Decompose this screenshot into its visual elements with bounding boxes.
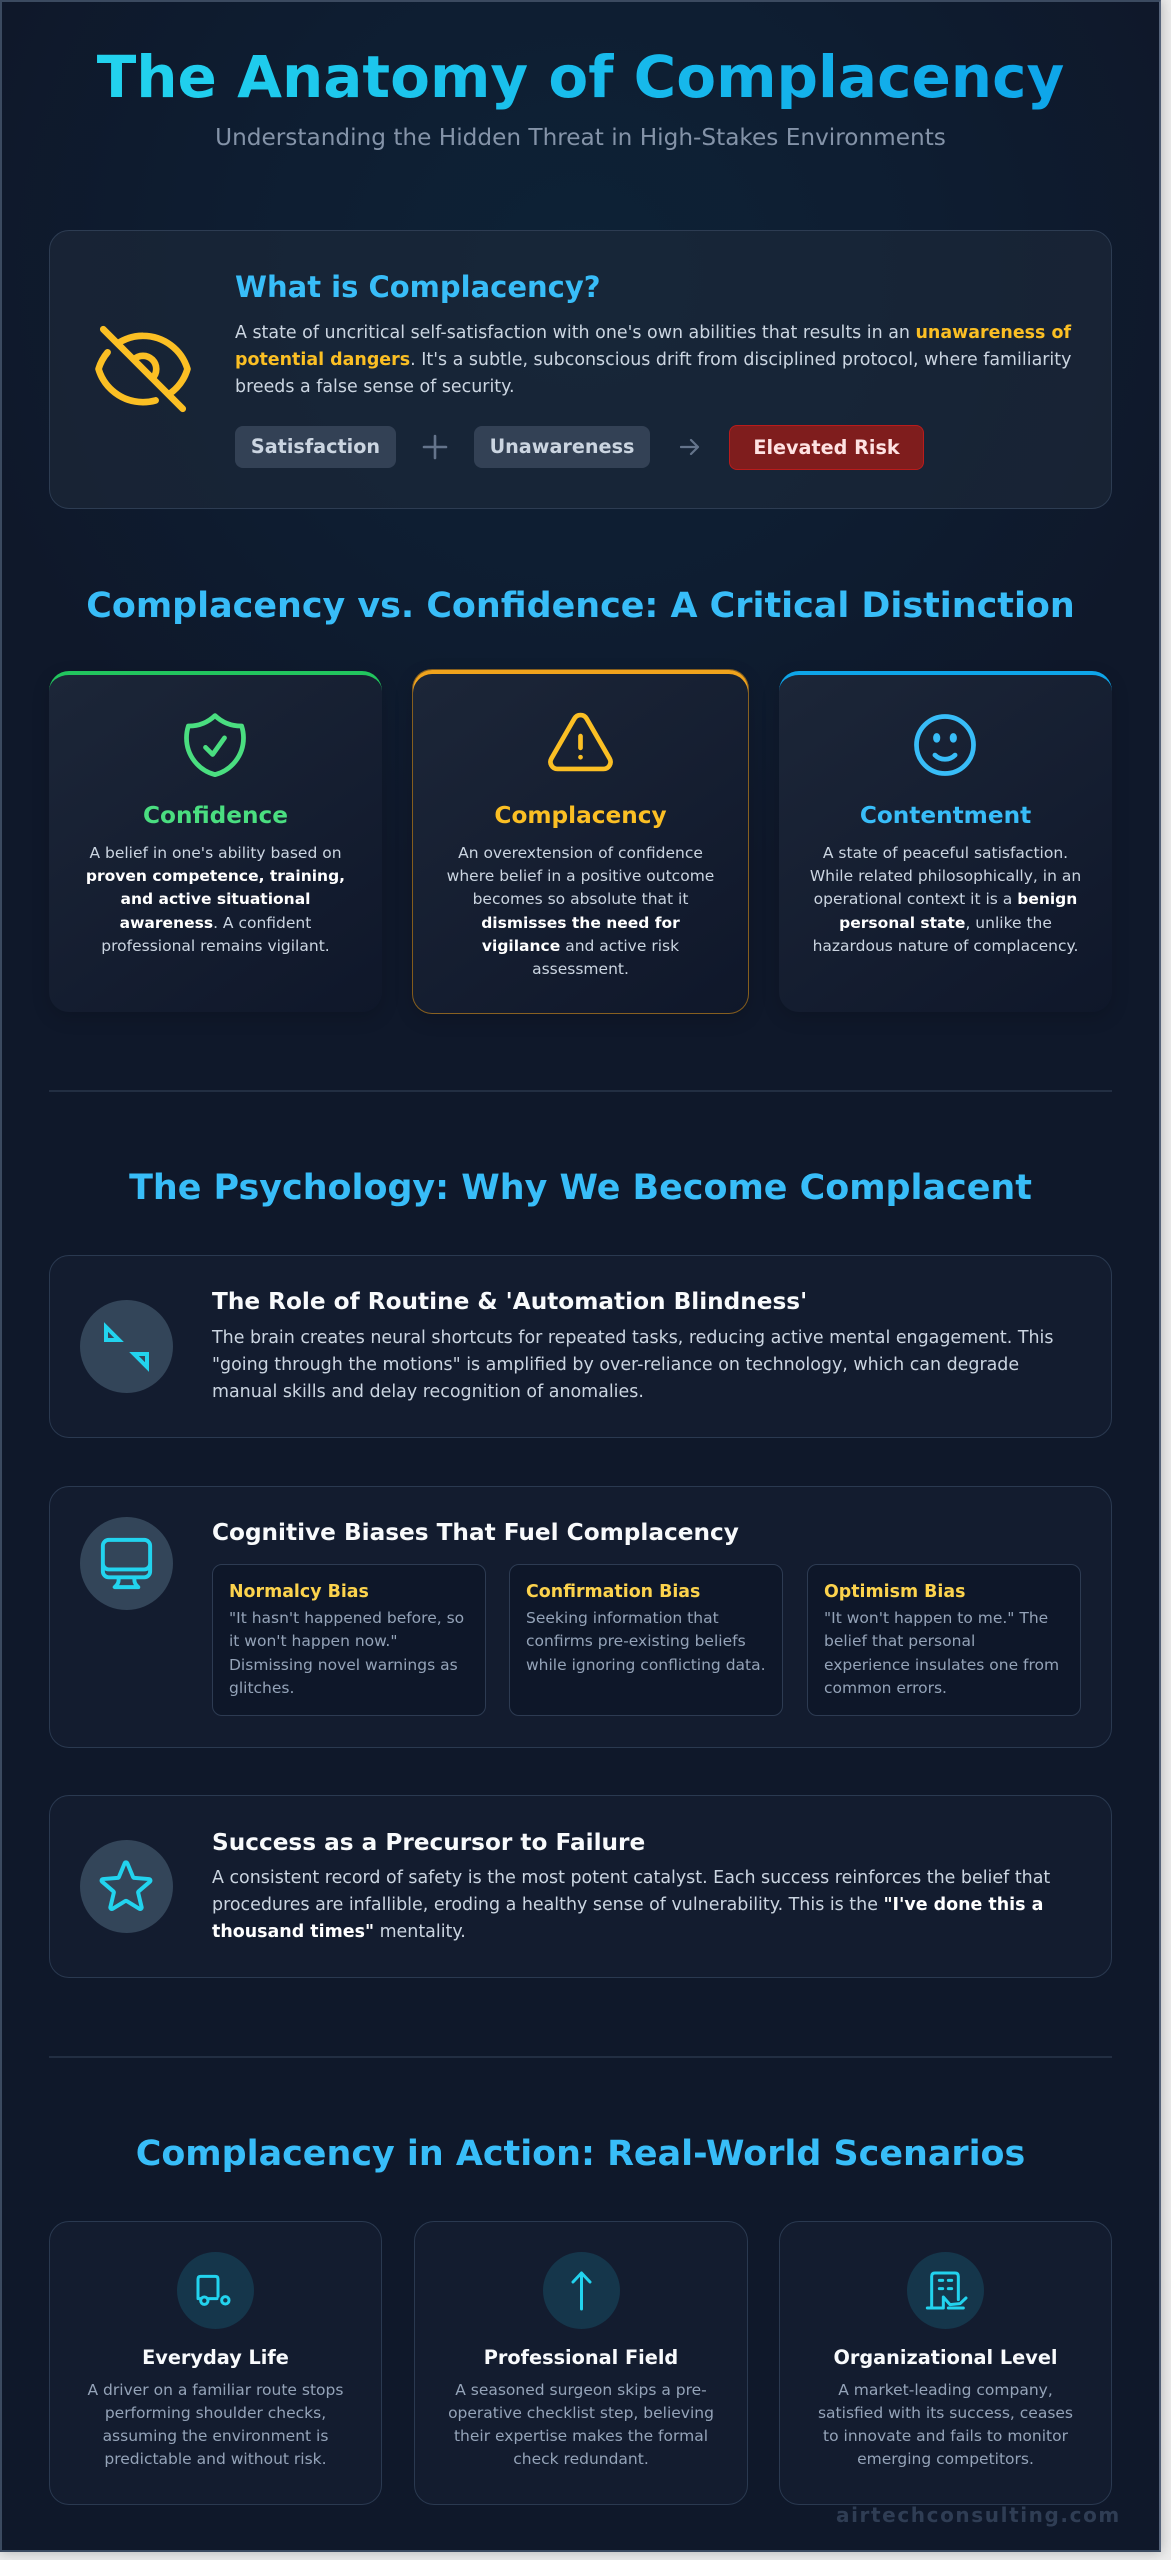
- icon: plus: [422, 434, 448, 460]
- panel: professional field: [414, 2221, 748, 2505]
- pill: unawareness: Unawareness: [490, 435, 634, 458]
- card text: A seasoned surgeon skips a pre-: [455, 2381, 707, 2399]
- card text: [818, 2381, 1073, 2468]
- icon: warning triangle: [548, 712, 613, 772]
- card text: and active situational: [120, 890, 310, 908]
- panel: organizational level: [779, 2221, 1112, 2505]
- card text: A belief in one's ability based on: [89, 844, 342, 862]
- icon: star: [80, 1840, 173, 1933]
- card text: An overextension of confidence: [458, 844, 703, 862]
- panel: complacency: [412, 669, 749, 1014]
- card heading: Success as a Precursor to Failure: [212, 1829, 645, 1856]
- icon: smile: [914, 714, 976, 776]
- icon: vehicle: [177, 2252, 254, 2329]
- icon: building: [907, 2252, 984, 2329]
- pill: unawareness: [474, 426, 650, 468]
- card text: assessment.: [532, 960, 629, 978]
- card heading: The Role of Routine & 'Automation Blindness': [212, 1288, 807, 1315]
- heading: complacency in action: Complacency in Action: Real-World Scenarios: [136, 2134, 1025, 2174]
- pill: elevated risk: [729, 425, 924, 470]
- card text: [212, 1328, 1053, 1402]
- card text: their expertise makes the formal: [454, 2427, 708, 2445]
- bias text: belief that personal: [824, 1632, 975, 1650]
- pill: satisfaction: [235, 426, 396, 468]
- bias text: [229, 1609, 464, 1697]
- card title: Everyday Life: [142, 2346, 289, 2369]
- card text: [212, 1868, 1050, 1942]
- card text: While related philosophically, in an: [810, 867, 1081, 885]
- panel: contentment: [779, 671, 1112, 1012]
- card text: [448, 2381, 714, 2468]
- title: The Anatomy of Complacency: [97, 43, 1064, 111]
- card text: hazardous nature of complacency.: [813, 937, 1078, 955]
- card text: [447, 844, 714, 978]
- bias text: [824, 1609, 1059, 1697]
- card text: [810, 844, 1081, 955]
- card text: vigilance and active risk: [482, 937, 679, 955]
- subtitle: Understanding the Hidden Threat in High-Stakes Environments: [215, 124, 946, 151]
- card text: A market-leading company,: [838, 2381, 1053, 2399]
- pill: satisfaction: Satisfaction: [251, 435, 380, 458]
- card text: dismisses the need for: [481, 914, 680, 932]
- bias text: experience insulates one from: [824, 1656, 1059, 1674]
- icon: up arrow: [542, 2252, 620, 2329]
- card text: [86, 844, 345, 955]
- card text: procedures are infallible, eroding a healthy sense of vulnerability. This is the "I've done this a: [212, 1895, 1043, 1915]
- card text: operative checklist step, believing: [448, 2404, 714, 2422]
- panel: everyday life: [49, 2221, 382, 2505]
- bias title: Confirmation Bias: [526, 1582, 700, 1602]
- bias text: "It won't happen to me." The: [824, 1609, 1048, 1627]
- bias text: confirms pre-existing beliefs: [526, 1632, 746, 1650]
- pill: elevated risk: Elevated Risk: [753, 436, 900, 459]
- bias: optimism: [807, 1564, 1081, 1716]
- watermark: airtechconsulting.com: [836, 2503, 1121, 2527]
- panel: success as a precursor: [49, 1795, 1112, 1978]
- card text: proven competence, training,: [86, 867, 345, 885]
- card text: where belief in a positive outcome: [447, 867, 714, 885]
- card text: professional remains vigilant.: [101, 937, 330, 955]
- card text: emerging competitors.: [857, 2450, 1034, 2468]
- icon: shield check: [184, 713, 246, 777]
- definition text: breeds a false sense of security.: [235, 377, 515, 397]
- card text: operational context it is a benign: [814, 890, 1077, 908]
- card text: A consistent record of safety is the most potent catalyst. Each success reinforces the belief that: [212, 1868, 1050, 1888]
- bias text: Dismissing novel warnings as: [229, 1656, 458, 1674]
- card text: A state of peaceful satisfaction.: [823, 844, 1068, 862]
- bias text: common errors.: [824, 1679, 947, 1697]
- card text: personal state, unlike the: [839, 914, 1052, 932]
- card text: performing shoulder checks,: [105, 2404, 326, 2422]
- card text: awareness. A confident: [120, 914, 311, 932]
- bias text: "It hasn't happened before, so: [229, 1609, 464, 1627]
- bias text: Seeking information that: [526, 1609, 719, 1627]
- panel: confidence: [49, 671, 382, 1012]
- card text: [88, 2381, 343, 2468]
- panel: cognitive biases: [49, 1486, 1112, 1748]
- panel: what is complacency: [49, 230, 1112, 509]
- bias text: glitches.: [229, 1679, 294, 1697]
- bias text: [526, 1609, 766, 1674]
- definition text: [235, 323, 1072, 397]
- card text: The brain creates neural shortcuts for repeated tasks, reducing active mental engagement. This: [212, 1328, 1053, 1348]
- icon: arrow: [680, 439, 700, 455]
- definition text: potential dangers. It's a subtle, subconscious drift from disciplined protocol, where familiarity: [235, 350, 1071, 370]
- bias title: Optimism Bias: [824, 1582, 965, 1602]
- card text: satisfied with its success, ceases: [818, 2404, 1073, 2422]
- bias text: it won't happen now.": [229, 1632, 397, 1650]
- card title: Confidence: [143, 802, 288, 829]
- heading: the psychology: The Psychology: Why We Become Complacent: [129, 1168, 1032, 1208]
- heading: complacency vs confidence: Complacency vs. Confidence: A Critical Distinction: [86, 586, 1075, 626]
- icon: computer monitor: [80, 1517, 173, 1610]
- card text: check redundant.: [513, 2450, 649, 2468]
- icon: two triangles: [80, 1300, 173, 1393]
- card text: "going through the motions" is amplified by over-reliance on technology, which can degrade: [212, 1355, 1019, 1375]
- card title: Contentment: [860, 802, 1031, 829]
- card title: Professional Field: [484, 2346, 678, 2369]
- definition text: A state of uncritical self-satisfaction with one's own abilities that results in an unawareness of: [235, 323, 1071, 343]
- heading: what is complacency: What is Complacency?: [235, 270, 601, 304]
- card text: manual skills and delay recognition of anomalies.: [212, 1382, 644, 1402]
- formula: satisfaction plus unawareness leads to risk: [235, 425, 924, 470]
- card text: assuming the environment is: [103, 2427, 328, 2445]
- card title: Complacency: [494, 802, 667, 829]
- bias: normalcy: [212, 1564, 486, 1716]
- bias: confirmation: [509, 1564, 783, 1716]
- panel: routine and automation blindness: [49, 1255, 1112, 1438]
- card text: becomes so absolute that it: [473, 890, 688, 908]
- card text: predictable and without risk.: [104, 2450, 327, 2468]
- card title: Organizational Level: [833, 2346, 1058, 2369]
- card text: to innovate and fails to monitor: [823, 2427, 1068, 2445]
- card text: A driver on a familiar route stops: [88, 2381, 343, 2399]
- card text: thousand times" mentality.: [212, 1922, 466, 1942]
- bias text: while ignoring conflicting data.: [526, 1656, 766, 1674]
- card heading: Cognitive Biases That Fuel Complacency: [212, 1519, 739, 1546]
- icon: eye with slash: [95, 326, 191, 412]
- bias title: Normalcy Bias: [229, 1582, 369, 1602]
